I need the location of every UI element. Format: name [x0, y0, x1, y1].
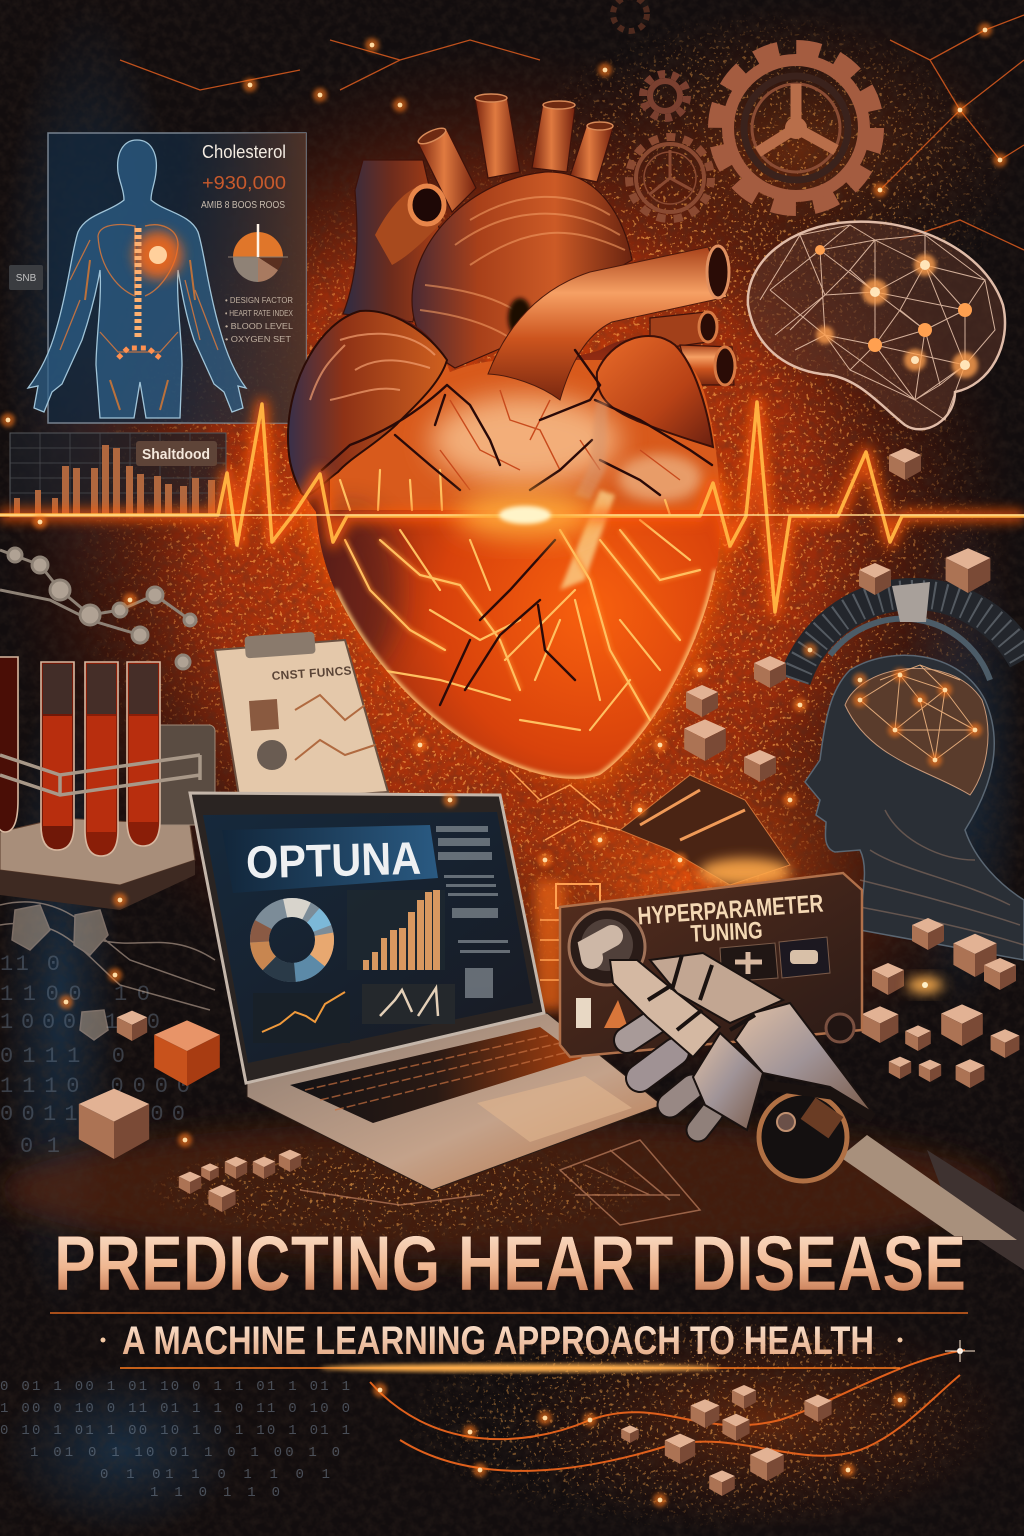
laptop screen [190, 793, 544, 1083]
arch muscle streaks [420, 197, 625, 338]
descending vessel [575, 400, 608, 500]
small gear [643, 74, 687, 118]
heart light overlays [300, 360, 730, 779]
cube pile right [862, 918, 1019, 1088]
list rows: • HEART RATE INDEX [225, 309, 294, 318]
background mini dashboard [510, 770, 620, 1010]
gears [613, 0, 876, 219]
reading value: +930,000 [202, 173, 286, 193]
head brain nodes [853, 668, 982, 767]
right atrial lobe [597, 336, 713, 447]
binary code bottom: 1 01 0 1 10 01 1 0 1 00 1 0 [30, 1445, 340, 1461]
left lobe highlights [310, 334, 435, 400]
palm [693, 1033, 763, 1130]
line chart on screen [253, 992, 350, 1043]
binary code left: 0111 0 [0, 1044, 125, 1069]
list rows: • BLOOD LEVEL [225, 322, 294, 331]
small chart on screen [362, 984, 455, 1024]
caption text: AMIB 8 BOOS ROOS [201, 200, 285, 211]
list rows: • DESIGN FACTOR [225, 296, 293, 305]
side menu on screen [436, 826, 510, 998]
brain network [748, 222, 1005, 429]
body scan panel [28, 133, 306, 423]
heart [288, 94, 735, 785]
list rows: • OXYGEN SET [225, 335, 291, 344]
vein glow [345, 530, 700, 720]
platform [0, 818, 195, 885]
head brain mesh [845, 665, 988, 795]
forearm dark bar [927, 1150, 1024, 1270]
wrist band [763, 1085, 873, 1118]
tube liquid [43, 716, 158, 832]
binary code left: 0011 1100 [0, 1102, 185, 1127]
bar chart on screen [347, 890, 445, 970]
gauge ring [795, 594, 1024, 680]
binary code bottom: 0 1 01 1 0 1 1 0 1 [100, 1467, 330, 1483]
dark hole under arch [508, 298, 532, 338]
knob [569, 909, 645, 985]
brain mesh [760, 225, 995, 420]
heart outer glow [300, 444, 723, 785]
rack [0, 755, 200, 795]
wrist joint [759, 1093, 847, 1181]
molecule chain [0, 548, 196, 669]
panel subheading: TUNING [690, 917, 763, 948]
orange mechanical device [620, 775, 791, 886]
aortic arch [412, 172, 632, 368]
pie chart [228, 224, 288, 282]
circuit mesh near laptop [300, 1140, 700, 1225]
superior vena cava [343, 160, 440, 322]
back of hand [735, 1003, 873, 1113]
gauge bracket [892, 582, 930, 622]
ecg pulse line [0, 402, 1024, 612]
top gear [613, 0, 647, 31]
glowing vein cracks [340, 470, 700, 730]
pulmonary vein lower [680, 345, 734, 385]
tubes [0, 657, 160, 856]
binary code bottom: 1 1 0 1 1 0 [150, 1485, 280, 1501]
binary code bottom: 1 00 0 10 0 11 01 1 1 0 11 0 10 0 [0, 1401, 350, 1417]
index finger [610, 960, 720, 1057]
vessel openings [416, 94, 613, 147]
list rows [225, 296, 294, 344]
tube tops [43, 664, 158, 714]
svc tube and opening [375, 186, 444, 265]
trackpad [477, 1076, 632, 1142]
cholesterol label: Cholesterol [202, 142, 286, 162]
pulmonary trunk [488, 247, 727, 400]
binary code bottom: 0 01 1 00 1 01 10 0 1 1 01 1 01 1 [0, 1379, 350, 1395]
upper vessel two [475, 96, 520, 178]
circuit traces left [0, 902, 215, 1040]
pulmonary opening [707, 246, 729, 298]
upper vessel four [570, 124, 613, 182]
body glow spine [118, 228, 182, 358]
title divider [50, 1313, 975, 1372]
binary code left: 1000 100 [0, 1010, 160, 1035]
neck mesh [850, 810, 1024, 945]
bar chart panel [10, 433, 226, 517]
circuit network top right [120, 15, 1024, 250]
optuna banner: OPTUNA [245, 832, 422, 888]
binary code left: 11 0 [0, 952, 60, 977]
keyboard [290, 1027, 582, 1123]
binary code left: 01 [20, 1134, 60, 1159]
large gear [716, 48, 876, 208]
donut chart [260, 908, 324, 972]
laptop base [247, 1013, 662, 1190]
silhouette [805, 655, 1024, 960]
clipboard heading: CNST FUNCS [271, 663, 352, 683]
hyperparameter tuning panel [560, 873, 862, 1057]
body figure [28, 140, 246, 418]
cube cluster centre [684, 448, 990, 782]
lower fingers [627, 1015, 712, 1130]
medium gear [629, 137, 711, 219]
side tag: SNB [16, 273, 37, 284]
bottom network [370, 1350, 965, 1507]
binary code bottom: 0 10 1 01 1 00 10 1 0 1 10 1 01 1 [0, 1423, 350, 1439]
robot hand and arm [610, 953, 1024, 1270]
laptop [190, 793, 662, 1190]
scattered sparks [1, 23, 1007, 1147]
bar chart panel: Shaltdood [142, 446, 210, 463]
clipboard report [215, 632, 388, 802]
knuckle finger [650, 953, 783, 1023]
side tag [9, 265, 43, 290]
finger joints [648, 955, 755, 1030]
left atrial lobe [288, 311, 447, 495]
binary code left: 1110 0000 [0, 1074, 190, 1099]
panel buttons [576, 937, 854, 1042]
panel heading: HYPERPARAMETER [637, 890, 824, 930]
binary code left [0, 952, 190, 1159]
brain nodes [815, 245, 978, 378]
subtitle: A MACHINE LEARNING APPROACH TO HEALTH [122, 1319, 874, 1363]
upper vessel one [418, 130, 476, 212]
great vessels [343, 94, 735, 385]
upper vessel three [532, 103, 575, 172]
heart body [288, 312, 720, 779]
cubes left of laptop [79, 1011, 301, 1212]
binary code left: 1100 10 [0, 982, 150, 1007]
dark coronary arteries [322, 350, 712, 705]
pulmonary vein upper [650, 312, 708, 350]
binary code bottom [0, 1379, 350, 1501]
pale region red capillaries [440, 390, 680, 490]
forearm light bar [840, 1135, 1017, 1240]
test tubes and rack [0, 657, 215, 910]
head with neural brain [795, 582, 1024, 960]
device [150, 725, 215, 825]
